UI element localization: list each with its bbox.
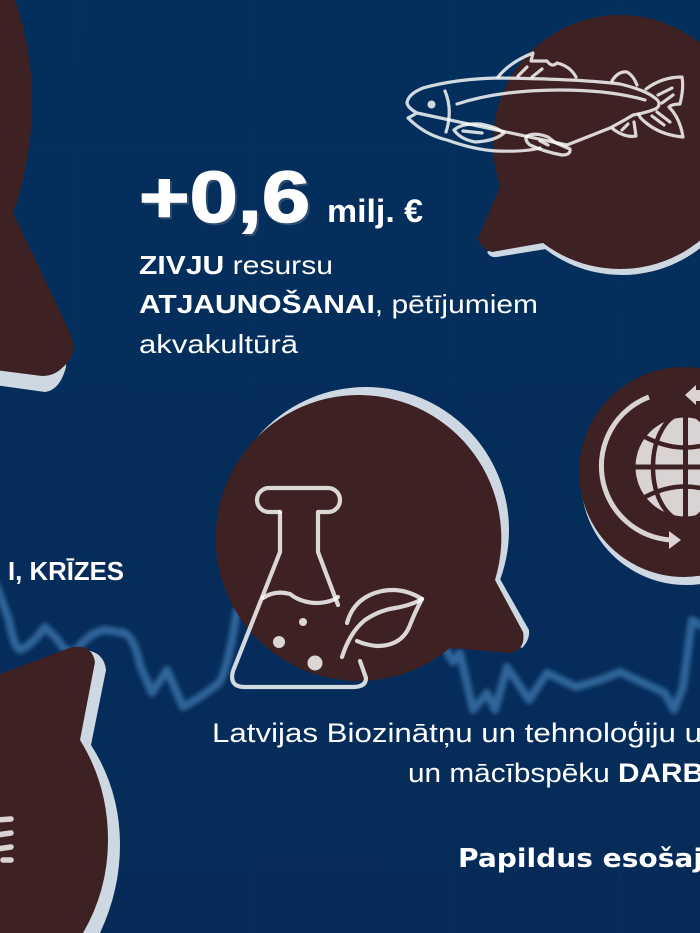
speech bubble: bottom left (0, 647, 120, 933)
chart line in background (0, 585, 700, 710)
text: crises label: I, KRĪZES (8, 556, 124, 586)
text block: fish resources: akvakultūrā (139, 329, 299, 359)
statistic: +0,6 milj. € (139, 158, 423, 240)
text block: fish resources: ATJAUNOŠANAI , pētījumiem (139, 289, 538, 319)
speech bubble: globe (579, 367, 700, 585)
icon: globe (601, 385, 700, 549)
text block: fish resources (139, 250, 538, 359)
speech bubble: top left (0, 0, 73, 392)
icon: flask with leaf (232, 488, 422, 687)
text block: university: Latvijas Biozinātņu un tehnoloģiju u (212, 718, 700, 748)
text block: university (212, 718, 700, 788)
icon: partial lines in bottom left bubble (0, 819, 11, 860)
speech bubble: flask (216, 387, 529, 681)
text: in addition: Papildus esošaj (458, 844, 700, 874)
statistic: +0,6 milj. €: +0,6 (139, 158, 310, 238)
statistic: +0,6 milj. €: milj. € (327, 193, 423, 229)
statistic: +0,6 milj. €: +0,6 (141, 160, 312, 240)
speech bubble: fish (478, 15, 700, 275)
text block: fish resources: ZIVJU resursu (139, 250, 333, 280)
text block: university: un mācībspēku DARB (408, 758, 700, 788)
icon: fish (407, 53, 683, 155)
